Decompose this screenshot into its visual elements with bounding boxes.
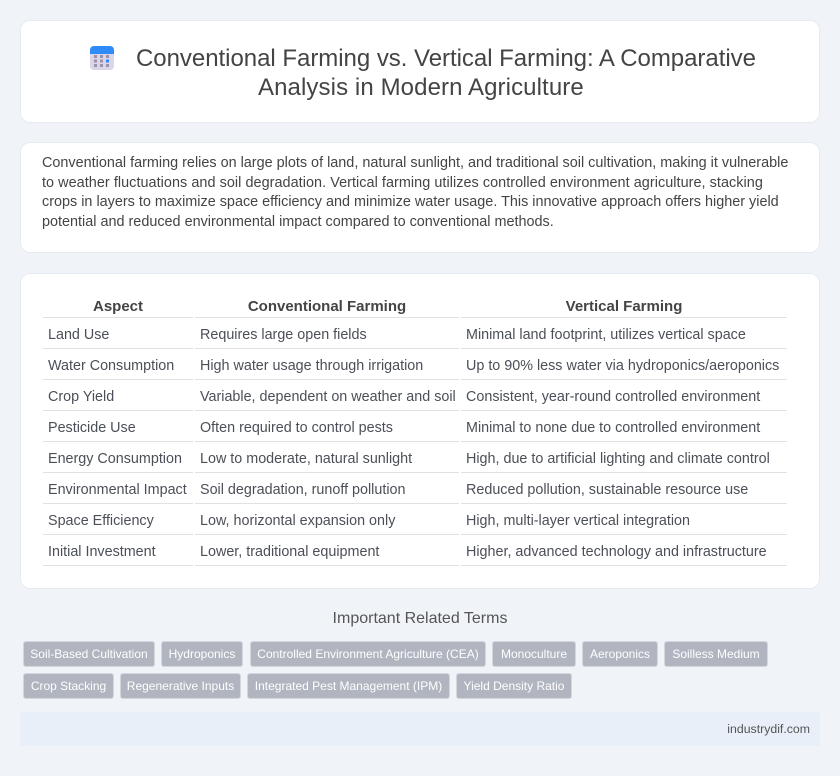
comparison table bbox=[43, 297, 787, 567]
text: Land Use bbox=[48, 327, 109, 343]
intro text: crops in layers to maximize space efficiency and minimize water usage. This innovative approach offers higher yield bbox=[42, 194, 779, 210]
tags row 2 bbox=[23, 673, 114, 699]
text: Minimal to none due to controlled environment bbox=[466, 420, 760, 436]
header panel bbox=[20, 20, 820, 123]
title bbox=[136, 45, 756, 101]
table panel bbox=[20, 273, 820, 589]
title: Conventional Farming vs. Vertical Farming: A Comparative bbox=[136, 45, 756, 72]
text: High, due to artificial lighting and climate control bbox=[466, 451, 770, 467]
tags row 1: Soil-Based Cultivation bbox=[30, 647, 148, 661]
tags row 2: Crop Stacking bbox=[31, 679, 106, 693]
text: Vertical Farming bbox=[566, 298, 682, 315]
footer source: industrydif.com bbox=[727, 722, 810, 736]
text: Minimal land footprint, utilizes vertical space bbox=[466, 327, 746, 343]
text: Lower, traditional equipment bbox=[200, 544, 379, 560]
tags row 1 bbox=[23, 641, 155, 667]
title: Analysis in Modern Agriculture bbox=[258, 74, 584, 101]
text: Aeroponics bbox=[590, 647, 650, 661]
text: Variable, dependent on weather and soil bbox=[200, 389, 456, 405]
text: High water usage through irrigation bbox=[200, 358, 423, 374]
text: Often required to control pests bbox=[200, 420, 393, 436]
text: Low to moderate, natural sunlight bbox=[200, 451, 412, 467]
text: Controlled Environment Agriculture (CEA) bbox=[257, 647, 479, 661]
table header: Aspect bbox=[93, 298, 143, 315]
related terms heading: Important Related Terms bbox=[333, 610, 507, 627]
text: Consistent, year-round controlled environment bbox=[466, 389, 760, 405]
text: Monoculture bbox=[501, 647, 567, 661]
intro text: potential and reduced environmental impact compared to conventional methods. bbox=[42, 214, 554, 230]
text: Soil degradation, runoff pollution bbox=[200, 482, 405, 498]
intro text bbox=[42, 155, 788, 230]
text: Pesticide Use bbox=[48, 420, 136, 436]
text: Higher, advanced technology and infrastructure bbox=[466, 544, 767, 560]
text: Water Consumption bbox=[48, 358, 174, 374]
intro text: to weather fluctuations and soil degradation. Vertical farming utilizes controlled environment agriculture, stacking bbox=[42, 175, 763, 191]
text: Hydroponics bbox=[169, 647, 235, 661]
text: Integrated Pest Management (IPM) bbox=[255, 679, 442, 693]
text: Space Efficiency bbox=[48, 513, 154, 529]
text: Reduced pollution, sustainable resource use bbox=[466, 482, 748, 498]
text: Regenerative Inputs bbox=[127, 679, 234, 693]
intro text: Conventional farming relies on large plots of land, natural sunlight, and traditional soil cultivation, making it vulnerable bbox=[42, 155, 788, 171]
text: Low, horizontal expansion only bbox=[200, 513, 395, 529]
text: Requires large open fields bbox=[200, 327, 367, 343]
text: Yield Density Ratio bbox=[464, 679, 564, 693]
icon: calendar bbox=[90, 46, 114, 70]
text: Initial Investment bbox=[48, 544, 156, 560]
intro panel bbox=[20, 142, 820, 253]
text: Up to 90% less water via hydroponics/aeroponics bbox=[466, 358, 779, 374]
text: Conventional Farming bbox=[248, 298, 406, 315]
text: Soilless Medium bbox=[672, 647, 760, 661]
text: Crop Yield bbox=[48, 389, 114, 405]
text: Energy Consumption bbox=[48, 451, 182, 467]
text: High, multi-layer vertical integration bbox=[466, 513, 690, 529]
footer bar bbox=[20, 712, 820, 746]
text: Environmental Impact bbox=[48, 482, 187, 498]
